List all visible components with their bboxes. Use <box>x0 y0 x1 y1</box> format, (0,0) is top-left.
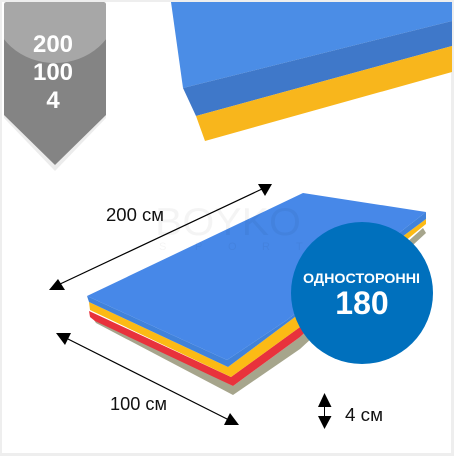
badge text: 100 <box>33 59 73 86</box>
watermark: O <box>228 241 237 253</box>
badge body <box>4 2 106 165</box>
badge: dimensions <box>4 2 106 171</box>
arrow: 4 cm thickness <box>318 393 332 429</box>
badge gloss <box>4 2 106 63</box>
label: 100 cm: 100 см <box>110 394 167 414</box>
badge text: 200 <box>33 31 73 58</box>
price circle <box>291 222 433 364</box>
blue top surface <box>171 2 452 88</box>
circle label: ОДНОСТОРОННІ <box>303 271 420 286</box>
photo: mat corner close-up <box>171 2 452 141</box>
label: 4 cm: 4 см <box>345 405 383 425</box>
yellow layer <box>196 46 452 141</box>
blue side <box>183 21 452 116</box>
label: 200 cm: 200 см <box>106 205 164 225</box>
red layer <box>89 236 410 386</box>
arrow: 100 cm <box>56 333 239 425</box>
blue top <box>87 193 426 360</box>
yellow layer <box>89 219 426 377</box>
badge shadow <box>4 112 106 171</box>
mat stack <box>87 193 426 395</box>
arrow: 200 cm <box>49 184 272 290</box>
watermark: S <box>159 241 166 253</box>
blue side <box>87 212 426 367</box>
watermark: P <box>195 241 202 253</box>
badge text <box>33 31 73 114</box>
circle number: 180 <box>335 285 389 321</box>
badge text: 4 <box>46 87 60 114</box>
watermark: T <box>296 241 303 253</box>
watermark: BOYKO <box>155 201 301 244</box>
beige layer <box>92 228 426 395</box>
watermark: R <box>262 241 270 253</box>
